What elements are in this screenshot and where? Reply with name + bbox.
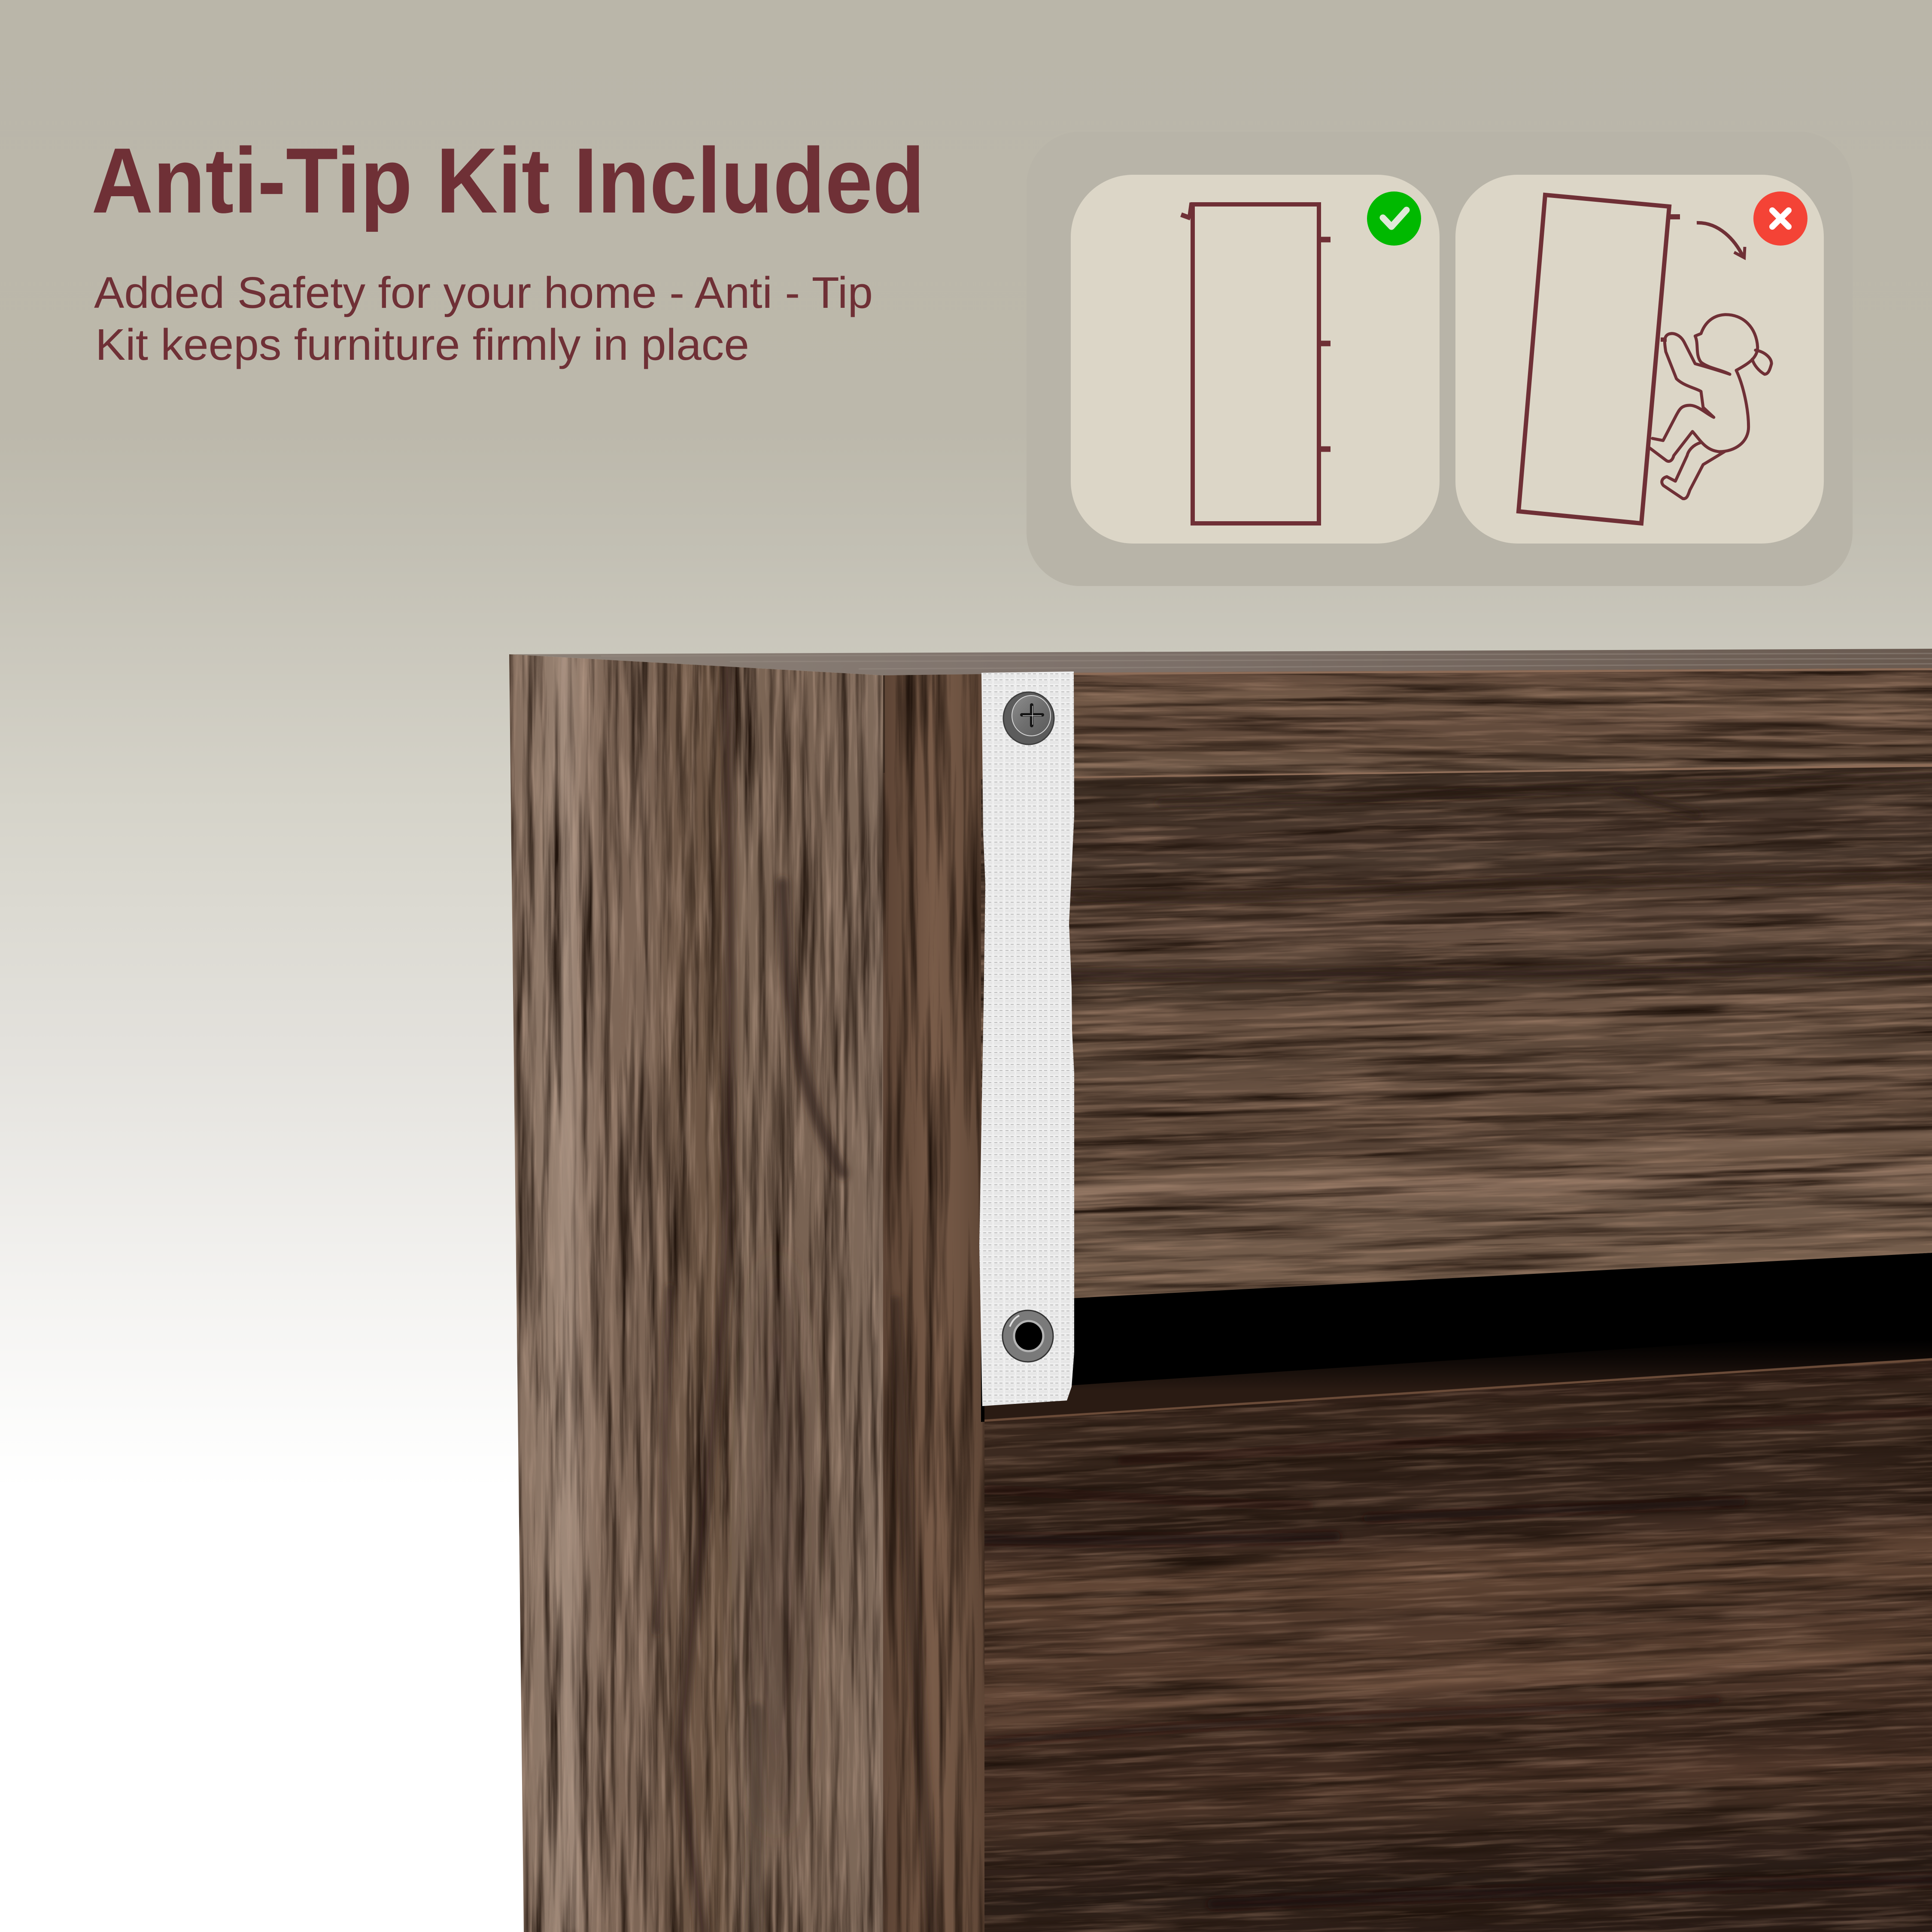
subtitle text: Added Safety for your home - Anti - Tip — [94, 268, 873, 317]
furniture: lower drawer front — [981, 1310, 1932, 1932]
subtitle text — [94, 268, 873, 369]
title: Anti-Tip Kit Included — [91, 128, 925, 232]
icon: tipping arrow — [1697, 223, 1745, 258]
anti-tip strap — [979, 671, 1074, 1406]
grommet — [1002, 1310, 1053, 1362]
card: unanchored furniture tipping — [1455, 175, 1824, 544]
icon: tilting cabinet — [1519, 195, 1680, 523]
furniture: open gap and shelf — [981, 1253, 1932, 1422]
furniture: side panel — [509, 653, 885, 1932]
furniture: top face — [509, 649, 1932, 675]
icon: red cross badge — [1753, 191, 1807, 246]
icon: upright cabinet with anchors — [1181, 203, 1331, 523]
furniture: upper drawer front — [979, 674, 1932, 1373]
card: anchored furniture — [1071, 175, 1440, 544]
subtitle text: Kit keeps furniture firmly in place — [95, 320, 749, 369]
furniture: top rail — [1071, 668, 1932, 780]
screw — [1003, 692, 1054, 744]
icon: climbing child — [1650, 315, 1771, 499]
icon: green check badge — [1367, 191, 1421, 246]
panel: safety comparison — [1027, 132, 1853, 586]
furniture: front edge strip — [883, 674, 986, 1932]
